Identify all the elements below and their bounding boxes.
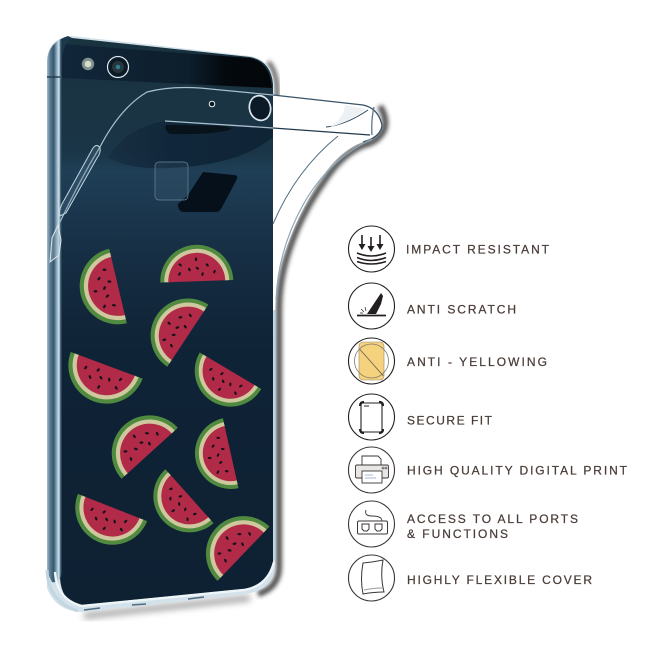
bottom left corner highlight <box>55 562 274 606</box>
feature: anti yellowing <box>348 338 547 384</box>
case lower opening line over background <box>273 128 370 135</box>
opening right fold <box>330 105 366 127</box>
icon: impact arrows <box>348 226 394 272</box>
case side button <box>59 146 100 216</box>
icon: fitted case <box>348 394 394 440</box>
feature: impact resistant <box>348 226 550 272</box>
wing tip inner line <box>372 107 374 135</box>
case dark lens area <box>108 121 273 168</box>
wing and right side shadow <box>258 106 385 594</box>
label line 2: & FUNCTIONS <box>407 527 508 541</box>
feature: high quality digital print <box>348 447 628 493</box>
fingerprint sensor <box>178 172 237 212</box>
case lower side button <box>50 225 61 262</box>
label: ANTI SCRATCH <box>407 302 516 316</box>
camera band <box>62 44 272 88</box>
icon: yellow case crossed out <box>348 338 394 384</box>
wing outer curve <box>276 139 372 300</box>
phone top right shadow <box>268 62 277 112</box>
label: ANTI - YELLOWING <box>407 355 547 369</box>
phone with clear case <box>47 36 385 616</box>
label: HIGHLY FLEXIBLE COVER <box>407 573 592 587</box>
metal left edge <box>47 36 72 582</box>
clear case wing <box>273 95 382 310</box>
feature: highly flexible cover <box>348 555 592 601</box>
speaker slot <box>166 125 232 134</box>
opening diagonal line <box>326 110 368 127</box>
icon: flexible cover <box>348 555 394 601</box>
case camera ring <box>247 93 273 123</box>
case lower opening line over phone <box>165 121 273 128</box>
case top edge over phone <box>60 88 273 222</box>
case top edge over background <box>273 95 382 142</box>
camera lens <box>108 56 128 78</box>
label: ACCESS TO ALL PORTS <box>407 512 578 526</box>
flash <box>82 58 94 70</box>
feature: secure fit <box>348 394 493 440</box>
icon: printer <box>348 447 394 493</box>
bottom rim details <box>84 597 204 610</box>
feature: access to all ports and functions <box>348 501 578 547</box>
watermelon slices <box>57 244 269 581</box>
phone body <box>60 38 273 605</box>
bottom shadow <box>84 598 250 616</box>
icon: ports <box>348 501 394 547</box>
wing inner curve <box>273 136 338 224</box>
label: HIGH QUALITY DIGITAL PRINT <box>407 464 628 478</box>
right rim <box>274 232 276 560</box>
left edge joint <box>47 76 60 78</box>
label: IMPACT RESISTANT <box>406 242 550 256</box>
case fingerprint cutout <box>155 162 188 200</box>
feature: anti scratch <box>348 283 516 329</box>
outer clear rim <box>47 36 275 612</box>
label: SECURE FIT <box>407 414 493 428</box>
bottom left clear corner <box>47 570 78 611</box>
icon: blade scratching surface <box>348 283 394 329</box>
case small hole <box>209 101 215 107</box>
